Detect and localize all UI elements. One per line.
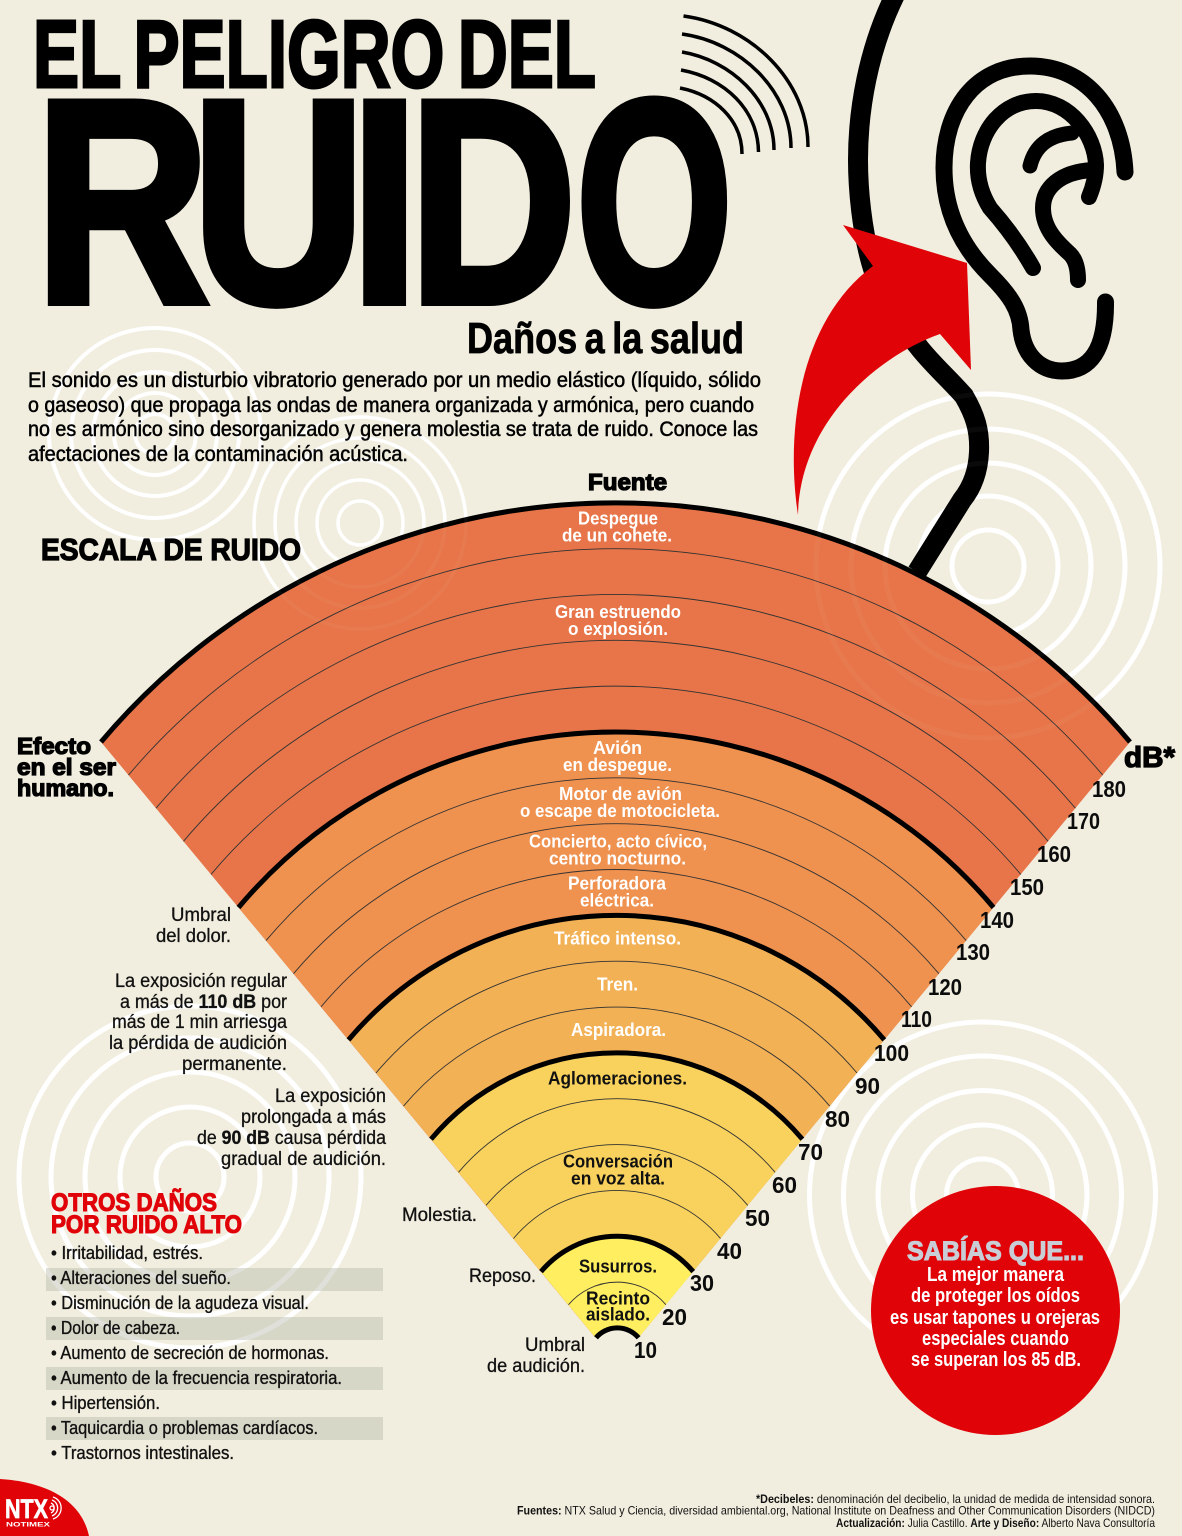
decibel scale numbers: 170 [1067,808,1100,834]
intro text [28,369,761,466]
callout: sabías que: se superan los 85 dB. [911,1349,1081,1371]
callout: sabías que: La mejor manera [927,1264,1065,1286]
list of damages: • Dolor de cabeza. [51,1318,180,1338]
fan labels: sources: Despegue [578,508,658,528]
notes: effects on humans: la pérdida de audición [109,1033,287,1054]
callout: sabías que [871,1186,1120,1435]
decibel scale numbers: 30 [690,1270,714,1296]
decibel scale numbers: 80 [825,1106,850,1132]
fan labels: sources: Tráfico intenso. [554,928,681,948]
fan labels: sources: Aglomeraciones. [548,1068,687,1088]
fan labels: sources: Aspiradora. [571,1019,666,1040]
decibel scale numbers: 150 [1010,874,1044,900]
heading: efecto en el ser humano: en el ser [17,754,116,780]
fan labels: sources: de un cohete. [562,524,672,546]
decibel scale numbers: 120 [928,974,962,1000]
title: ruido: D [409,40,577,364]
logo: notimex: NTX [5,1494,48,1524]
decibel scale numbers: 90 [855,1073,880,1099]
title: ruido [35,40,733,364]
decibel scale numbers: 20 [662,1304,687,1330]
decibel scale numbers [634,776,1126,1363]
notes: effects on humans: La exposición [275,1086,386,1107]
heading: otros daños: OTROS DAÑOS [51,1187,217,1217]
callout: sabías que: de proteger los oídos [911,1285,1080,1307]
fan labels: sources: centro nocturno. [549,848,686,868]
decibel scale numbers: 70 [798,1139,823,1165]
list of damages [51,1243,342,1463]
heading: dB: dB* [1124,742,1176,774]
notes: effects on humans: prolongada a más [241,1107,386,1128]
decibel scale numbers: 10 [634,1337,657,1363]
fan labels: sources: aislado. [586,1304,650,1324]
notes: effects on humans: de 90 dB causa pérdida [197,1128,386,1149]
decibel scale numbers: 140 [980,907,1014,933]
notes: effects on humans: permanente. [182,1054,287,1075]
fan labels: sources: eléctrica. [580,890,654,910]
decibel scale numbers: 40 [717,1238,742,1264]
intro text: El sonido es un disturbio vibratorio generado por un medio elástico (líquido, sólido [28,369,761,392]
footer credits: Actualización: Julia Castillo. Arte y Diseño: Alberto Nava Consultoría [836,1516,1155,1530]
decibel scale numbers: 130 [956,939,990,965]
fan labels: sources: Avión [593,737,642,758]
list of damages: • Aumento de la frecuencia respiratoria. [51,1368,342,1388]
list of damages: • Aumento de secreción de hormonas. [51,1343,329,1363]
decibel scale numbers: 180 [1092,776,1126,802]
fan labels: sources [520,508,720,1324]
heading: otros daños: POR RUIDO ALTO [51,1211,242,1239]
decibel scale numbers: 160 [1037,841,1071,867]
decibel scale numbers: 100 [874,1040,909,1066]
decibel scale numbers: 110 [901,1006,932,1032]
list of damages: • Taquicardia o problemas cardíacos. [51,1418,318,1438]
callout: sabías que: SABÍAS QUE... [907,1235,1084,1266]
decibel scale numbers: 60 [772,1172,797,1198]
list of damages: • Alteraciones del sueño. [51,1268,231,1288]
notes: effects on humans: más de 1 min arriesga [112,1012,287,1033]
notes: effects on humans: Molestia. [402,1205,477,1226]
notes: effects on humans: Umbral [171,905,231,926]
callout: sabías que: es usar tapones u orejeras [890,1307,1100,1329]
list of damages: • Trastornos intestinales. [51,1443,234,1463]
fan labels: sources: Gran estruendo [555,601,681,622]
fan labels: sources: en voz alta. [571,1168,665,1188]
panel: otros daños [46,1187,383,1463]
fan labels: sources: o escape de motocicleta. [520,800,720,821]
title: ruido: R [35,40,210,364]
heading: fuente: Fuente [588,469,667,495]
logo: notimex [0,1479,89,1536]
notes: effects on humans: Reposo. [469,1266,536,1287]
heading: efecto en el ser humano: humano. [17,775,114,801]
icon: sound waves [680,16,808,154]
title: ruido: O [576,40,733,364]
heading: efecto en el ser humano: Efecto [17,733,91,759]
fan labels: sources: Recinto [586,1288,650,1308]
fan labels: sources: o explosión. [568,618,668,639]
heading: escala de ruido: ESCALA DE RUIDO [41,532,301,567]
notes: effects on humans: de audición. [487,1356,585,1377]
decibel scale numbers: 50 [745,1205,770,1231]
fan labels: sources: Conversación [563,1150,673,1172]
fan labels: sources: Concierto, acto cívico, [529,830,707,852]
intro text: afectaciones de la contaminación acústica. [28,443,408,466]
list of damages: • Irritabilidad, estrés. [51,1243,203,1263]
chart: noise scale fan [101,394,1160,1364]
notes: effects on humans: gradual de audición. [221,1149,386,1170]
intro text: no es armónico sino desorganizado y genera molestia se trata de ruido. Conoce las [28,418,758,441]
fan labels: sources: Tren. [597,974,638,994]
notes: effects on humans: a más de 110 dB por [120,992,288,1013]
footer credits: *Decibeles: denominación del decibelio, la unidad de medida de intensidad sonora. [756,1492,1155,1506]
intro text: o gaseoso) que propaga las ondas de manera organizada y armónica, pero cuando [28,394,754,417]
notes: effects on humans: La exposición regular [115,971,288,992]
icon: ear [944,66,1125,371]
fan labels: sources: en despegue. [563,754,672,775]
title: ruido: U [192,40,365,364]
icon: head outline line [858,0,979,572]
logo: notimex: NOTIMEX [6,1522,51,1528]
subtitle: Daños a la salud [467,314,744,363]
notes: effects on humans [109,905,585,1377]
fan labels: sources: Susurros. [579,1256,657,1276]
callout: sabías que: especiales cuando [922,1328,1069,1350]
title: el peligro del: EL PELIGRO DEL [33,1,596,108]
notes: effects on humans: Umbral [525,1335,585,1356]
list of damages: • Hipertensión. [51,1393,160,1413]
fan labels: sources: Perforadora [568,872,667,894]
fan labels: sources: Motor de avión [559,783,682,804]
heading: efecto en el ser humano [17,733,116,801]
footer credits [517,1492,1155,1530]
list of damages: • Disminución de la agudeza visual. [51,1293,309,1313]
notes: effects on humans: del dolor. [156,926,231,947]
arrow: red curved arrow [794,225,971,515]
title: ruido: I [350,40,419,364]
heading: otros daños [51,1187,242,1239]
